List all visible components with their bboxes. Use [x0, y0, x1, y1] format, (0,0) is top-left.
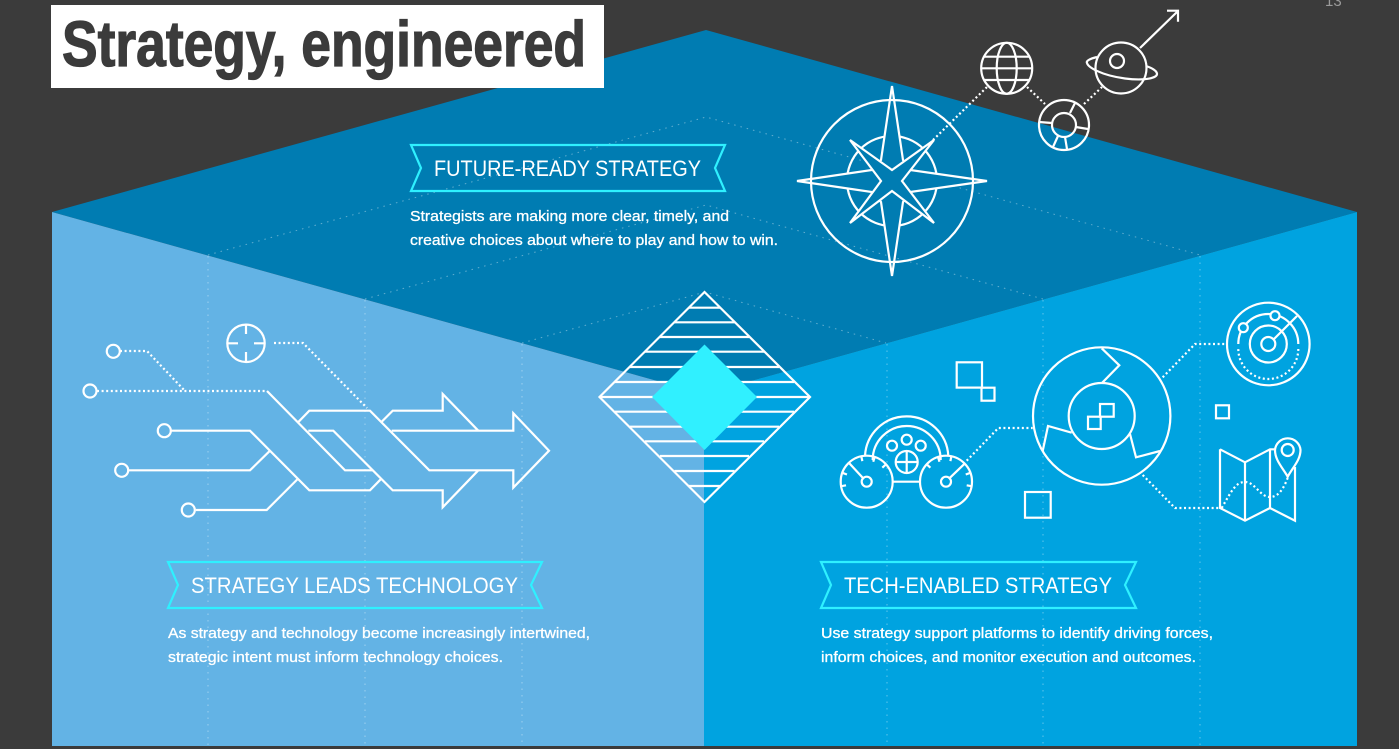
text: strategy leads technology description	[168, 626, 590, 666]
icon: intertwined arrows	[84, 325, 549, 516]
dotted connectors: hub to icons	[967, 344, 1227, 508]
text: future-ready description: creative choices about where to play and how to win.	[410, 233, 778, 249]
banner: future-ready strategy: FUTURE-READY STRATEGY	[434, 156, 701, 181]
icon: scattered squares	[957, 362, 1229, 518]
text: future-ready description	[410, 209, 778, 249]
dotted connector: globe to donut	[1027, 87, 1045, 104]
panel: strategy leads technology	[52, 212, 704, 746]
arrow: up and to the right	[1140, 11, 1178, 48]
center striped diamond	[600, 292, 810, 502]
crosshair target	[227, 325, 265, 362]
cyan diamond	[652, 344, 757, 450]
banner: future-ready strategy	[411, 145, 725, 191]
dotted connector: donut to planet	[1084, 87, 1102, 104]
text: tech-enabled description	[821, 626, 1213, 666]
panel: future-ready strategy	[52, 11, 1357, 394]
text: tech-enabled description: Use strategy support platforms to identify driving forces,	[821, 626, 1213, 642]
icon: radar	[1227, 303, 1310, 385]
dotted connector: compass to globe	[933, 87, 987, 140]
title: Strategy, engineered	[62, 8, 586, 80]
text: tech-enabled description: inform choices, and monitor execution and outcomes.	[821, 650, 1196, 666]
panel: tech-enabled strategy	[704, 212, 1357, 746]
banner: strategy leads technology: STRATEGY LEADS TECHNOLOGY	[191, 573, 518, 598]
icon: globe	[981, 43, 1032, 94]
banner: strategy leads technology	[168, 562, 542, 608]
banner: tech-enabled strategy: TECH-ENABLED STRATEGY	[844, 573, 1112, 598]
icon: folded map with pin	[1220, 438, 1300, 521]
text: strategy leads technology description: strategic intent must inform technology choices.	[168, 650, 503, 666]
text: future-ready description: Strategists are making more clear, timely, and	[410, 209, 729, 225]
icon: segmented donut	[1039, 100, 1089, 150]
icon: dashboard gauges	[841, 416, 972, 508]
banner: tech-enabled strategy	[821, 562, 1136, 608]
icon: compass rose	[797, 86, 987, 276]
text: strategy leads technology description: As strategy and technology become increasingly intertwined,	[168, 626, 590, 642]
icon: planet with ring	[1087, 42, 1157, 94]
icon: central hub ring	[1033, 347, 1170, 485]
